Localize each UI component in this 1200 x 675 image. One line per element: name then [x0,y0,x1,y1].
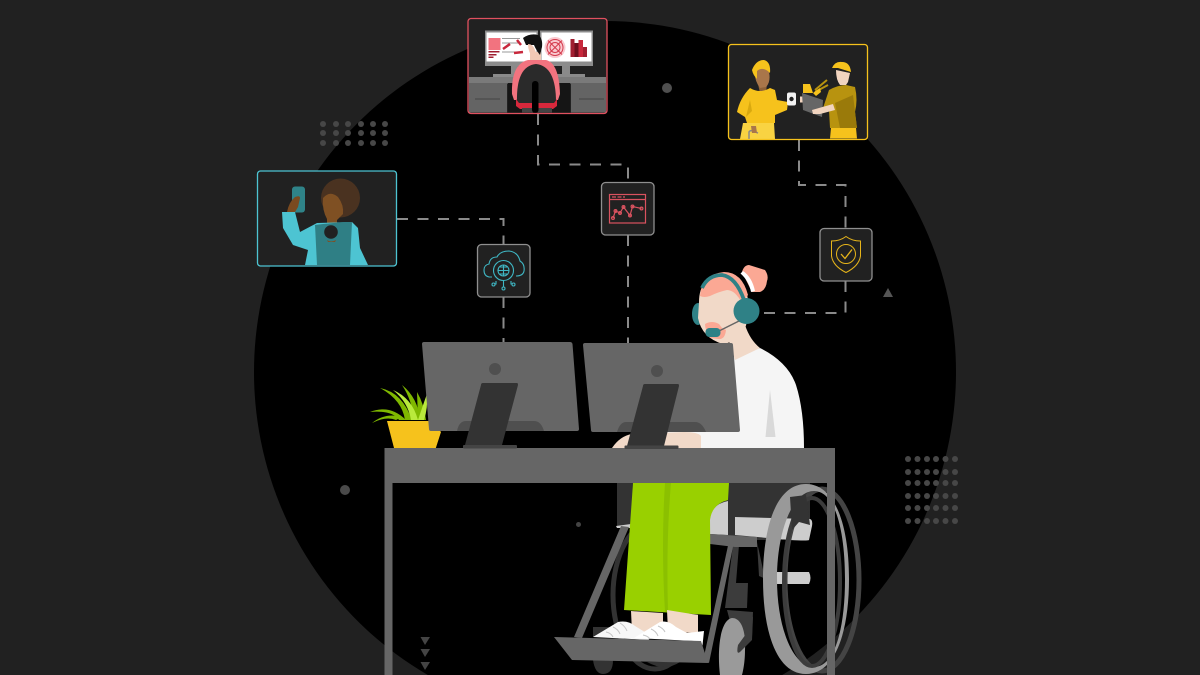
rear dark frame and small wheel [613,521,697,669]
seat cushion and armrest [710,501,728,535]
icon: cloud network globe [478,244,530,297]
forearm and hand [612,432,701,448]
seated analyst from behind [512,34,560,113]
desk [384,448,835,675]
lower frame pieces [725,542,777,658]
head and hair [692,265,768,344]
support agent body [612,265,804,448]
desk counter and cabinets [469,66,606,112]
front caster [719,618,745,675]
panel: customer holding phone [258,171,396,266]
wheelchair [593,483,859,675]
neck [728,325,760,360]
ankles and sneakers [593,610,704,650]
pants [624,483,729,615]
panel border: yellow [728,44,868,140]
footplate and frame struts [554,526,734,663]
icon: security shield with check [820,228,872,281]
woman with afro raising phone [282,178,368,265]
panel: grocery delivery [728,44,868,140]
panel: analyst at monitors [468,18,607,114]
agent torso: white top [660,348,804,448]
panel border: teal [258,171,396,266]
dashed connector lines [397,114,846,343]
decorative dots and triangles [340,83,893,670]
main wheel [785,489,859,671]
panel border: red [468,18,607,114]
torso fold [766,390,776,437]
courier with grocery bag [800,62,857,138]
background black circle [254,21,956,675]
customer with cane paying by phone [737,60,796,139]
decorative dot grid: lower right [905,456,958,524]
decorative dot grid: upper left [320,121,388,146]
left monitor back [422,342,579,448]
plant in yellow pot [370,385,441,449]
right monitor back [583,343,740,449]
dual monitor dashboards [485,30,593,66]
icon: browser line chart [602,182,654,235]
